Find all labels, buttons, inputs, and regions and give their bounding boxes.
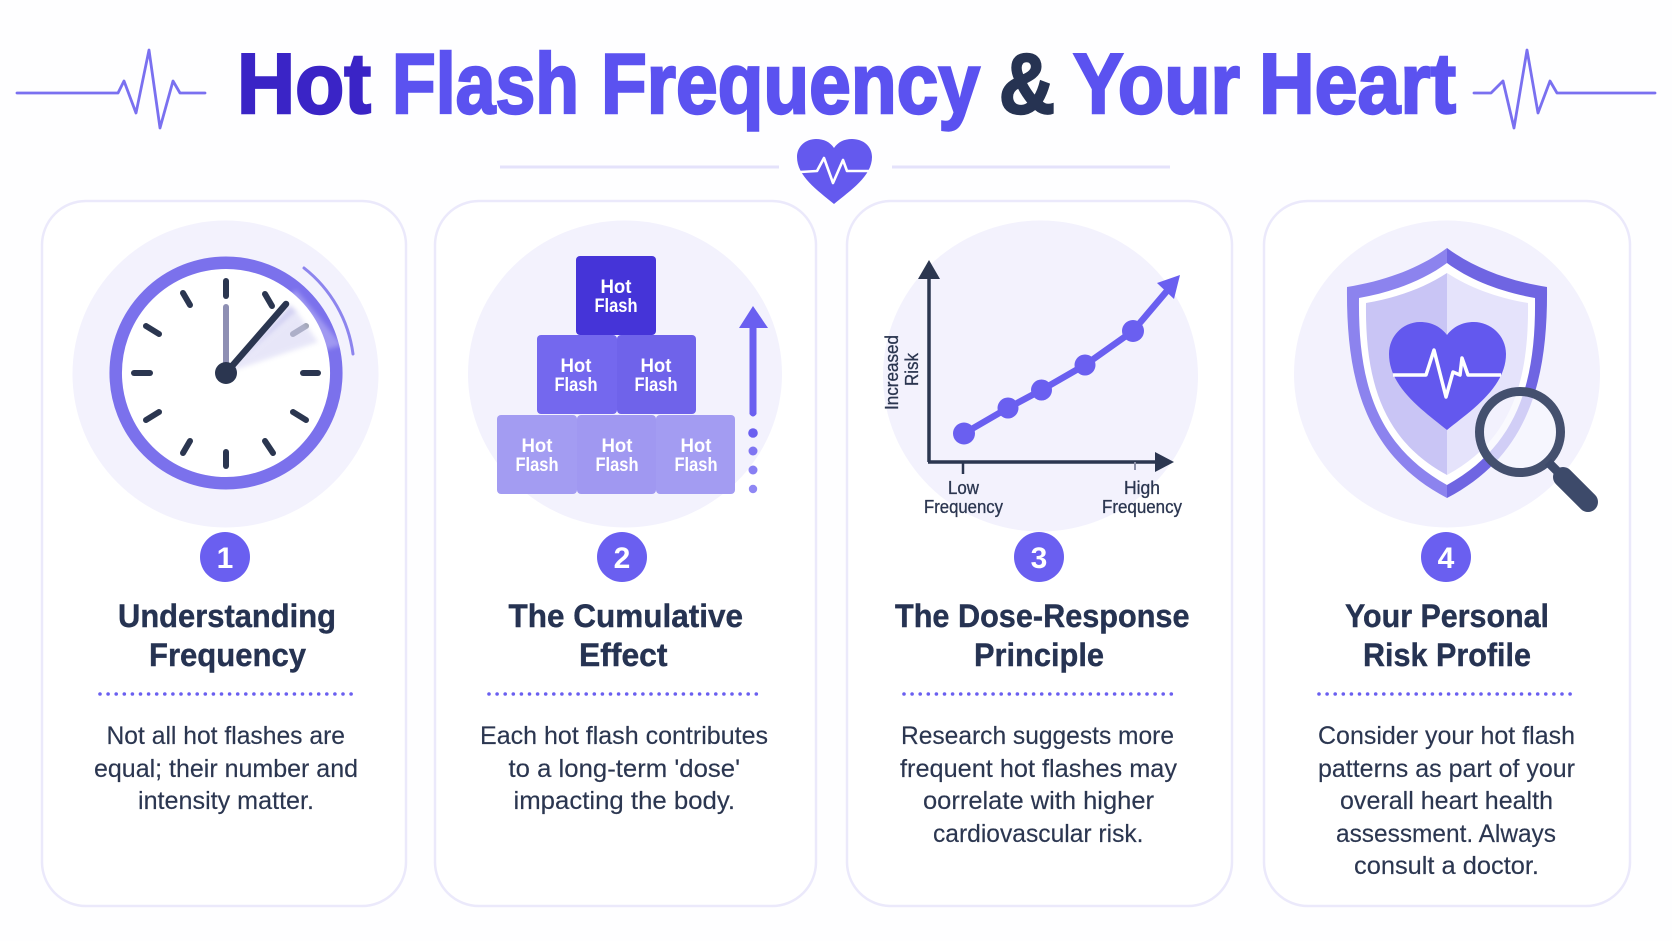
title: Frequency bbox=[601, 37, 980, 132]
text block: consult a doctor. bbox=[1354, 852, 1539, 880]
badge: 3: 3 bbox=[1031, 542, 1047, 575]
text block: impacting the body. bbox=[514, 787, 735, 815]
heading: Understanding bbox=[118, 598, 336, 634]
icon: stacked blocks pyramid: Hot bbox=[522, 436, 553, 457]
chart: risk versus frequency bbox=[882, 220, 1198, 532]
icon: stacked blocks pyramid: Hot bbox=[680, 436, 712, 457]
panel: the dose-response principle bbox=[847, 201, 1232, 906]
text block bbox=[480, 722, 768, 815]
badge: 2: 2 bbox=[614, 542, 630, 575]
heading: Principle bbox=[974, 637, 1104, 673]
icon: stacked blocks pyramid: Hot bbox=[640, 356, 672, 377]
icon: clock bbox=[72, 220, 378, 528]
text block bbox=[94, 722, 358, 815]
text block: patterns as part of your bbox=[1318, 755, 1575, 783]
chart: risk versus frequency: High bbox=[1124, 478, 1160, 498]
icon: stacked blocks pyramid: Flash bbox=[634, 375, 678, 396]
icon: right ECG pulse line bbox=[1474, 50, 1655, 128]
title: Your bbox=[1073, 37, 1240, 132]
icon: stacked blocks pyramid: Flash bbox=[594, 296, 638, 317]
icon: stacked blocks pyramid: Flash bbox=[674, 455, 718, 476]
badge: 3 bbox=[1014, 532, 1064, 582]
text block: oorrelate with higher bbox=[923, 787, 1154, 815]
heading: The Dose-Response bbox=[895, 598, 1190, 634]
panel: understanding frequency bbox=[42, 201, 406, 906]
icon: left ECG pulse line bbox=[17, 50, 205, 128]
title: Heart bbox=[1259, 37, 1456, 132]
panel: the cumulative effect bbox=[435, 201, 816, 906]
title bbox=[237, 37, 1456, 132]
text block: overall heart health bbox=[1340, 787, 1553, 815]
text block: intensity matter. bbox=[138, 787, 314, 815]
badge: 4 bbox=[1421, 532, 1471, 582]
heading bbox=[895, 598, 1190, 673]
text block: Research suggests more bbox=[901, 722, 1174, 750]
icon: stacked blocks pyramid bbox=[468, 220, 782, 528]
text block: cardiovascular risk. bbox=[933, 820, 1144, 848]
badge: 1 bbox=[200, 532, 250, 582]
title: Flash bbox=[392, 37, 579, 132]
title: & bbox=[999, 37, 1055, 132]
heading: Frequency bbox=[149, 637, 306, 673]
chart: risk versus frequency: Low bbox=[948, 478, 980, 498]
badge: 4: 4 bbox=[1438, 542, 1455, 575]
chart: risk versus frequency: Frequency bbox=[1102, 497, 1182, 517]
chart: risk versus frequency: Frequency bbox=[924, 497, 1003, 517]
panel: your personal risk profile bbox=[1264, 201, 1630, 906]
icon: heart with pulse bbox=[797, 139, 872, 204]
badge: 2 bbox=[597, 532, 647, 582]
text block: equal; their number and bbox=[94, 755, 358, 783]
heading bbox=[508, 598, 743, 673]
title: Hot bbox=[237, 37, 371, 132]
arrow: upward build-up bbox=[739, 306, 768, 493]
badge: 1: 1 bbox=[217, 542, 233, 575]
text block bbox=[900, 722, 1177, 848]
icon: stacked blocks pyramid: Hot bbox=[560, 356, 592, 377]
icon: stacked blocks pyramid: Hot bbox=[602, 436, 633, 457]
heading: The Cumulative bbox=[508, 598, 743, 634]
text block: Consider your hot flash bbox=[1318, 722, 1575, 750]
text block: frequent hot flashes may bbox=[900, 755, 1177, 783]
text block: to a long-term 'dose' bbox=[508, 755, 740, 783]
heading bbox=[118, 598, 336, 673]
heading: Risk Profile bbox=[1363, 637, 1531, 673]
text block: assessment. Always bbox=[1336, 820, 1556, 848]
rising risk line bbox=[953, 275, 1180, 444]
heading bbox=[1345, 598, 1549, 673]
heading: Effect bbox=[579, 637, 668, 673]
chart: risk versus frequency: Increased bbox=[882, 335, 902, 410]
text block: Each hot flash contributes bbox=[480, 722, 768, 750]
text block bbox=[1318, 722, 1575, 880]
icon: stacked blocks pyramid: Hot bbox=[600, 277, 632, 298]
icon: shield with heart and magnifier bbox=[1294, 220, 1600, 528]
icon: stacked blocks pyramid: Flash bbox=[516, 455, 558, 476]
icon: stacked blocks pyramid: Flash bbox=[596, 455, 638, 476]
text block: Not all hot flashes are bbox=[106, 722, 345, 750]
heading: Your Personal bbox=[1345, 598, 1549, 634]
chart: risk versus frequency: Risk bbox=[902, 352, 922, 386]
icon: stacked blocks pyramid: Flash bbox=[554, 375, 598, 396]
axes bbox=[918, 260, 1174, 474]
